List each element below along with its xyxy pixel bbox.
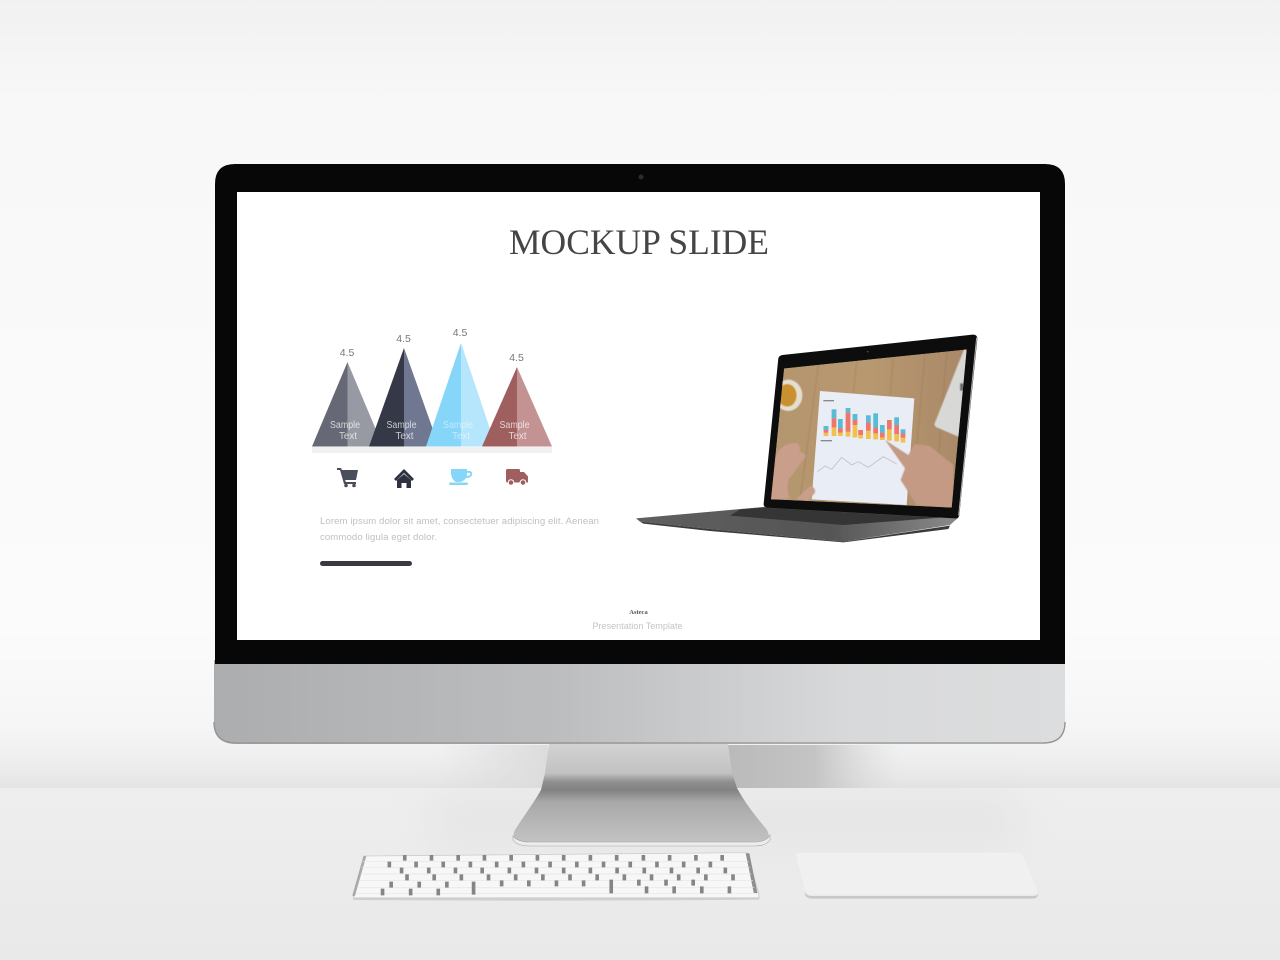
- triangle chart: [312, 327, 552, 453]
- triangle labels: Text: [396, 431, 414, 442]
- trackpad: [796, 853, 1038, 899]
- keyboard: [353, 853, 759, 901]
- desk reflection: [430, 795, 1020, 845]
- triangle labels: Sample: [386, 420, 417, 431]
- right hand: [885, 440, 953, 508]
- body text: [320, 516, 599, 543]
- triangle 4: [482, 367, 552, 446]
- monitor: [214, 164, 1065, 744]
- monitor bezel: [215, 164, 1065, 664]
- laptop base: [636, 507, 958, 542]
- background: desk: [0, 788, 1280, 960]
- title: MOCKUP SLIDE: [509, 222, 769, 262]
- progress bar: [320, 561, 412, 566]
- value labels: 4.5: [396, 333, 411, 345]
- monitor chin: [214, 660, 1065, 744]
- body text: commodo ligula eget dolor.: [320, 532, 437, 543]
- triangle labels: Sample: [330, 420, 360, 431]
- triangle labels: Text: [339, 431, 357, 442]
- icon: house: [394, 469, 414, 488]
- triangle 2: [369, 348, 439, 446]
- triangle labels: Text: [452, 431, 470, 442]
- left hand: [770, 443, 815, 501]
- chart base shadow: [312, 447, 552, 453]
- bar stacks: [824, 408, 905, 443]
- monitor shadow on wall: [440, 745, 900, 788]
- key rows: [356, 861, 757, 893]
- triangle 3: [426, 343, 496, 446]
- laptop lid: [764, 335, 977, 518]
- slide screen: [237, 192, 1040, 640]
- line chart: [817, 457, 897, 472]
- triangle labels: Sample: [500, 420, 530, 431]
- monitor stand: [513, 744, 770, 846]
- paper with charts: [812, 391, 914, 505]
- triangle labels: Sample: [443, 420, 473, 431]
- icon: truck: [506, 469, 528, 485]
- triangle labels: [330, 420, 530, 442]
- icon: coffee cup: [449, 469, 472, 485]
- footer subtitle: Presentation Template: [592, 621, 682, 632]
- value labels: [340, 327, 524, 364]
- coffee cup: [780, 379, 803, 412]
- key gaps: [381, 855, 735, 895]
- tablet: [934, 349, 968, 437]
- icon: shopping cart: [337, 468, 358, 487]
- laptop screen photo: [770, 349, 968, 508]
- value labels: 4.5: [453, 327, 467, 339]
- value labels: 4.5: [509, 352, 524, 364]
- value labels: 4.5: [340, 347, 354, 359]
- footer brand: Asteca: [629, 609, 648, 616]
- laptop mockup: [636, 335, 977, 542]
- triangle 1: [312, 362, 383, 446]
- body text: Lorem ipsum dolor sit amet, consectetuer adipiscing elit. Aenean: [320, 516, 599, 527]
- triangle labels: Text: [508, 431, 527, 442]
- camera: [638, 174, 644, 180]
